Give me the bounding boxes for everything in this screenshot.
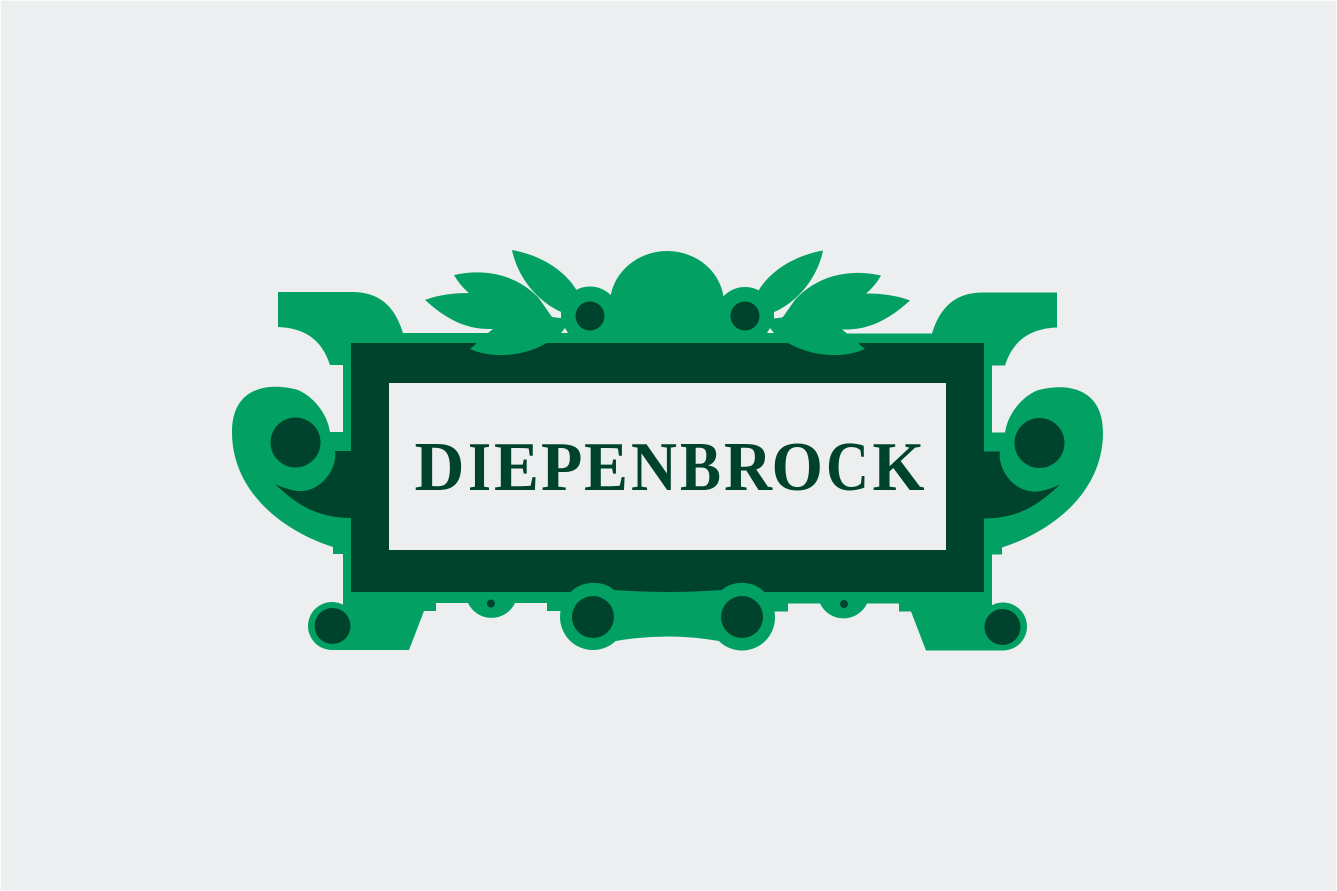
left lower leaf	[470, 333, 560, 355]
brand name: O	[772, 429, 823, 506]
brand name	[414, 429, 924, 506]
right half of ornament	[667, 250, 1103, 650]
brand name: I	[468, 429, 491, 506]
small gaps between leaves	[538, 297, 797, 333]
central dome	[610, 251, 724, 340]
bottom corner rivets	[314, 608, 350, 644]
lower green bumps overlapping the frame	[570, 583, 765, 593]
right lower leaf	[775, 333, 865, 355]
brand name: D	[414, 429, 464, 506]
brand name: E	[494, 429, 539, 506]
brand name: E	[584, 429, 628, 506]
ornamental green frame body	[232, 250, 1103, 650]
brand name: K	[872, 429, 924, 506]
top knobs	[576, 302, 604, 330]
left half of ornament	[232, 250, 668, 650]
lower arch cut-out	[616, 636, 719, 660]
dark ornamental dots	[270, 302, 1064, 645]
brand name: N	[631, 429, 677, 506]
dark rectangular frame	[351, 343, 984, 592]
brand name: C	[826, 429, 869, 506]
dark scroll wings	[275, 451, 1060, 518]
brand name: R	[724, 429, 773, 506]
scroll eyes	[270, 418, 320, 468]
light name panel	[389, 383, 946, 550]
brand name: P	[541, 429, 582, 506]
brand name: B	[680, 429, 721, 506]
bottom small rivets	[487, 600, 495, 608]
bottom large rivets	[572, 596, 614, 638]
